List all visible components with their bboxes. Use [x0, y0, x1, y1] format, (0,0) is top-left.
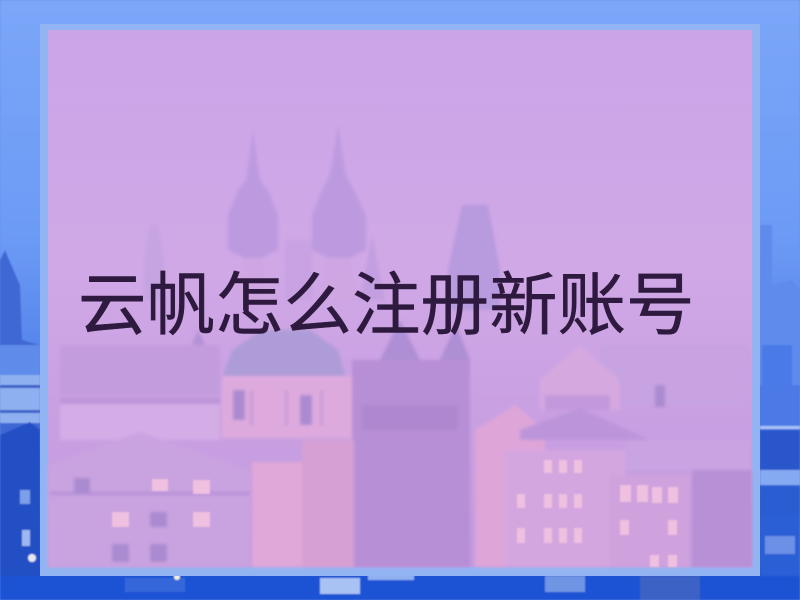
dome: [222, 330, 346, 378]
title: 云帆怎么注册新账号: [78, 267, 695, 344]
left church spire: [228, 130, 278, 258]
faded cityscape: [48, 125, 752, 567]
mid row buildings: [60, 345, 220, 395]
central baroque building: [222, 376, 352, 438]
left snowy roof: [60, 398, 220, 440]
dim windows: [74, 385, 665, 562]
panel: lilac overlay: [48, 30, 752, 567]
lit windows: [112, 460, 678, 567]
right buildings: [475, 405, 545, 567]
right church spire: [312, 125, 366, 258]
tower dark: [352, 360, 470, 567]
